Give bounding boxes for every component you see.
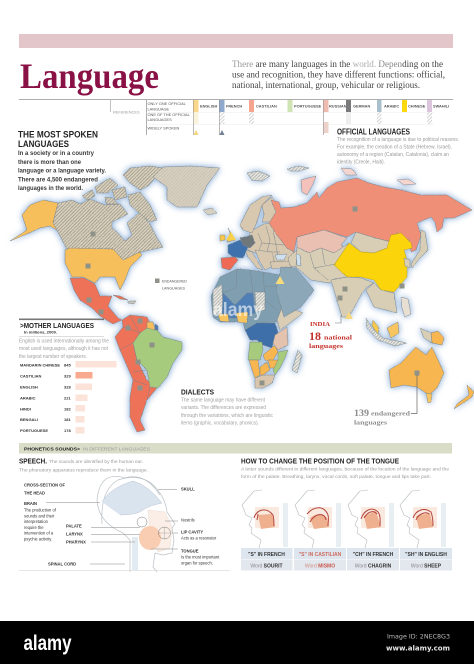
panel: speech: The sounds are identified by the human ear. <box>49 459 143 465</box>
legend: references: REFERENCES <box>113 110 140 114</box>
map marker: widely spoken triangles <box>226 232 353 319</box>
labels: head diagram: LARYNX <box>66 532 83 536</box>
bar chart: speakers <box>20 361 116 434</box>
heading: the most spoken languages: THE MOST SPOKEN <box>18 130 98 140</box>
table: sound examples: "SH" IN ENGLISH <box>405 552 447 558</box>
table: sound examples <box>241 548 452 570</box>
legend: references: ONE OF THE OFFICIAL <box>148 112 191 117</box>
legend: endangered languages: LANGUAGES <box>162 286 185 290</box>
panel: official languages: autonomy of a region (Catalan, Catalonia), claim an <box>337 152 449 158</box>
legend: references <box>110 100 449 135</box>
legend: references: FRENCH <box>226 104 242 108</box>
legend: references: GERMAN <box>353 104 370 108</box>
bar chart: speakers: 221 <box>64 396 71 400</box>
labels: head diagram: sounds and their <box>24 514 55 518</box>
labels: head diagram <box>24 482 220 566</box>
callout: india: languages <box>309 343 344 350</box>
panel: dialects: The same language may have different <box>181 398 266 404</box>
intro text: There are many languages in the world. Depending on the <box>232 60 443 70</box>
panel: dialects: variants. The differences are expressed <box>181 405 266 411</box>
legend: endangered languages: ENDANGERED <box>162 278 187 284</box>
callout: india <box>309 315 352 350</box>
labels: head diagram: Nostrils <box>181 518 195 522</box>
section band: phonetics sounds <box>19 443 452 454</box>
callout: india: national <box>324 334 352 342</box>
labels: head diagram: TONGUE <box>181 548 199 554</box>
panel: mother languages: >MOTHER LANGUAGES <box>20 321 94 330</box>
heading: the most spoken languages <box>18 130 98 149</box>
illustration: s in french <box>242 490 288 548</box>
bar chart: speakers: BENGALI <box>20 417 38 422</box>
labels: head diagram: Is the most important <box>181 554 220 560</box>
legend: references: PORTUGUESE <box>294 104 322 108</box>
panel: how to change the position of the tongue: form of the palate. Breathing, larynx, vocal cords, soft palate, tongue and lips take part. <box>241 474 431 480</box>
table: sound examples: Word MISMO <box>305 564 335 570</box>
panel: mother languages <box>19 318 116 434</box>
labels: head diagram: BRAIN <box>24 501 37 506</box>
panel: dialects <box>181 388 273 426</box>
world map <box>10 166 474 432</box>
labels: head diagram: SPINAL CORD <box>48 562 76 566</box>
bar chart: speakers: CASTILIAN <box>20 374 41 378</box>
callout: australia endangered <box>354 375 417 426</box>
panel: mother languages: English is used internationally among the <box>19 338 109 344</box>
panel: official languages: For example, the creation of a State (Hebrew, Israel), <box>337 144 452 150</box>
callout: india: 18 <box>309 331 321 343</box>
panel: speech: The phonatory apparatus reproduce them in the language. <box>19 468 148 474</box>
labels: head diagram: interpretation <box>24 519 49 524</box>
panel: official languages: The recognition of a language is due to political reasons. <box>337 137 459 143</box>
legend: references: CHINESE <box>408 104 426 108</box>
panel: official languages: OFFICIAL LANGUAGES <box>337 128 411 136</box>
labels: head diagram: PALATE <box>66 524 82 528</box>
bar chart: speakers: PORTUGUESE <box>20 428 48 433</box>
illustration: s in castilian <box>295 490 341 548</box>
illustration: head cross-section <box>97 476 175 572</box>
callout: australia endangered: endangered <box>371 410 410 418</box>
illustration: sh in english <box>400 490 446 548</box>
legend: references: LANGUAGE <box>148 106 170 112</box>
labels: head diagram: THE HEAD <box>24 490 45 496</box>
heading: the most spoken languages: LANGUAGES <box>18 139 69 149</box>
panel: dialects: through the variations, which are linguistic <box>181 413 273 419</box>
callout: india: INDIA <box>310 321 330 328</box>
panel: speech <box>19 456 230 572</box>
panel: how to change the position of the tongue <box>241 458 452 570</box>
text block: most spoken: language or a language variety. <box>18 168 106 174</box>
labels: head diagram: organ for speech. <box>181 560 213 566</box>
legend: references: CASTILIAN <box>256 104 277 108</box>
bar chart: speakers: 328 <box>64 384 71 390</box>
footer bar <box>0 621 474 664</box>
legend: references: ONLY ONE OFFICIAL <box>148 101 187 106</box>
panel: official languages: identity (Creole, Haiti). <box>337 160 385 166</box>
table: sound examples: "S" IN CASTILIAN <box>299 552 342 558</box>
bar chart: speakers: ENGLISH <box>20 384 38 390</box>
panel: how to change the position of the tongue: A letter sounds different in different languages, because of the location of the language and the <box>241 466 449 472</box>
legend: references: RUSSIAN <box>329 104 347 108</box>
bar chart: speakers: ARABIC <box>20 396 36 400</box>
table: sound examples: Word SOURIT <box>250 564 283 570</box>
watermark: alamy <box>213 300 263 321</box>
callout: australia endangered: 139 <box>354 409 369 419</box>
labels: head diagram: SKULL <box>181 486 195 492</box>
panel: speech: SPEECH. <box>19 456 47 466</box>
legend: endangered languages <box>155 278 187 290</box>
labels: head diagram: PHARYNX <box>66 540 86 544</box>
labels: head diagram: LIP CAVITY <box>181 530 203 534</box>
africa <box>211 269 303 388</box>
footer bar: www.alamy.com <box>386 644 450 652</box>
panel: mother languages: most used languages, although it has not <box>19 346 109 352</box>
text block: most spoken: there is more than one <box>18 159 81 166</box>
footer bar: alamy <box>24 632 72 655</box>
text block: most spoken <box>18 150 106 192</box>
bar chart: speakers: MANDARIN CHINESE <box>20 362 60 368</box>
section band: phonetics sounds: IN DIFFERENT LANGUAGES <box>83 446 150 452</box>
table: sound examples: "CH" IN FRENCH <box>353 552 394 558</box>
legend: references: ARABIC <box>384 104 399 108</box>
legend: references: WIDELY SPOKEN <box>148 126 180 130</box>
panel: dialects: items (graphic, vocabulary, phonics). <box>181 420 259 426</box>
intro text: national, international, group, vehicular or religious. <box>232 81 420 91</box>
panel: mother languages: the largest number of speakers. <box>19 354 87 360</box>
asia <box>269 168 472 317</box>
text block: most spoken: There are 4,500 endangered <box>18 176 98 184</box>
callout: australia endangered: languages <box>354 420 388 426</box>
bar chart: speakers: 182 <box>64 406 71 412</box>
bar chart: speakers: 178 <box>64 428 71 433</box>
table: sound examples: Word SHEEP <box>411 564 442 570</box>
section band: phonetics sounds: PHONETICS SOUNDS> <box>24 446 80 452</box>
europe <box>220 166 309 270</box>
title: Language <box>20 56 159 96</box>
map markers: endangered languages <box>86 206 420 390</box>
panel: mother languages: In millions, 2009. <box>24 330 57 334</box>
bar chart: speakers: 181 <box>64 417 71 422</box>
legend: references: LANGUAGES <box>148 117 172 122</box>
labels: head diagram: psychic activity. <box>24 536 52 542</box>
labels: head diagram: intervention of a <box>24 530 54 536</box>
intro text <box>232 60 445 91</box>
intro text: use and recognition, they have different functions: official, <box>232 70 445 80</box>
panel: dialects: DIALECTS <box>181 388 214 396</box>
panel: official languages <box>337 128 459 166</box>
bar chart: speakers: 845 <box>64 362 71 368</box>
table: sound examples: "S" IN FRENCH <box>248 552 285 558</box>
bar chart: speakers: 329 <box>64 374 71 378</box>
north america <box>10 166 220 324</box>
panel: how to change the position of the tongue: HOW TO CHANGE THE POSITION OF THE TONGUE <box>241 458 399 466</box>
illustration: ch in french <box>348 490 394 548</box>
table: sound examples: Word CHAGRIN <box>355 564 392 570</box>
labels: head diagram: require the <box>24 525 44 530</box>
labels: head diagram: Acts as a resonator <box>181 536 217 540</box>
legend: references: SWAHILI <box>433 104 449 108</box>
oceania <box>366 318 474 409</box>
text block: most spoken: languages in the world. <box>18 185 83 192</box>
top colour band <box>19 34 453 48</box>
bar chart: speakers: HINDI <box>20 406 31 412</box>
labels: head diagram: CROSS-SECTION OF <box>24 482 65 488</box>
text block: most spoken: In a society or in a country <box>18 150 94 157</box>
legend: references: ENGLISH <box>200 104 217 108</box>
labels: head diagram: The production of <box>24 508 57 512</box>
south america <box>115 315 182 432</box>
footer bar: Image ID: 2NEC8G3 <box>387 634 450 640</box>
